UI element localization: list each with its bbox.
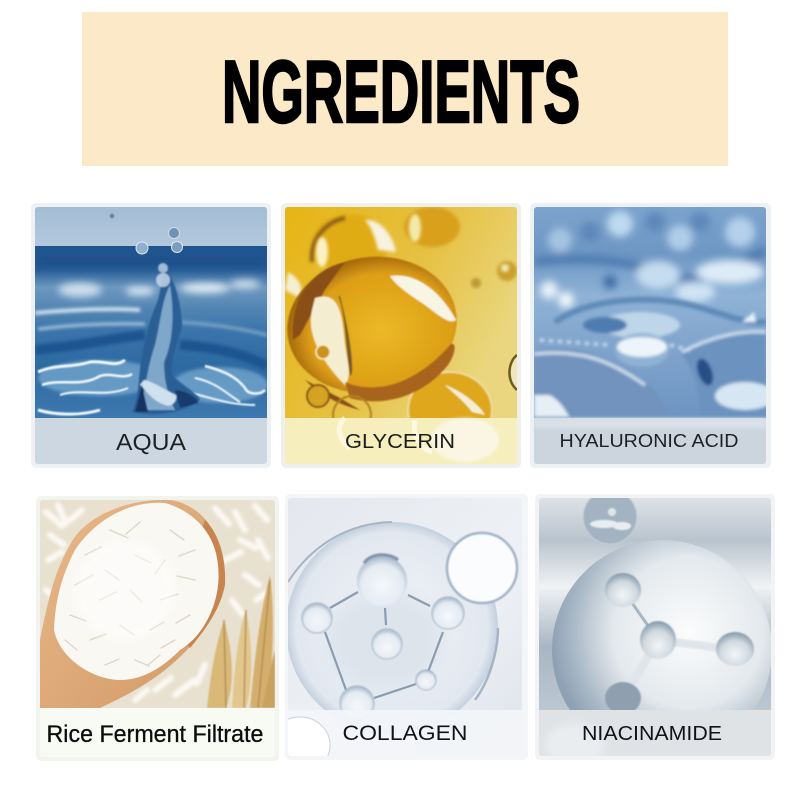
panel: hyaluronic acid [530,203,775,468]
label: rice ferment filtrate: Rice Ferment Filtrate [46,721,264,748]
panel: glycerin [278,203,521,468]
wheat [207,575,275,708]
panel: aqua [31,203,271,468]
background rice [46,505,268,700]
rice pile [54,503,219,680]
label: niacinamide: NIACINAMIDE [582,723,722,745]
title: NGREDIENTS: NGREDIENTS [222,42,580,141]
large bubble [286,256,494,418]
label: hyaluronic acid: HYALURONIC ACID [560,431,738,451]
title banner [82,12,728,166]
molecule atoms [302,555,464,720]
panel: niacinamide [535,490,775,767]
upper bubbles [404,207,460,247]
molecule bonds [636,638,716,674]
label: collagen: COLLAGEN [342,722,468,745]
panel: rice ferment filtrate [36,496,279,761]
small bubble cluster [583,498,637,544]
wooden spoon [40,500,225,708]
label: glycerin: GLYCERIN [345,431,455,453]
molecule atoms [605,573,754,714]
label: aqua: AQUA [116,429,187,455]
molecule bonds [325,592,443,698]
panel: collagen [285,494,528,760]
